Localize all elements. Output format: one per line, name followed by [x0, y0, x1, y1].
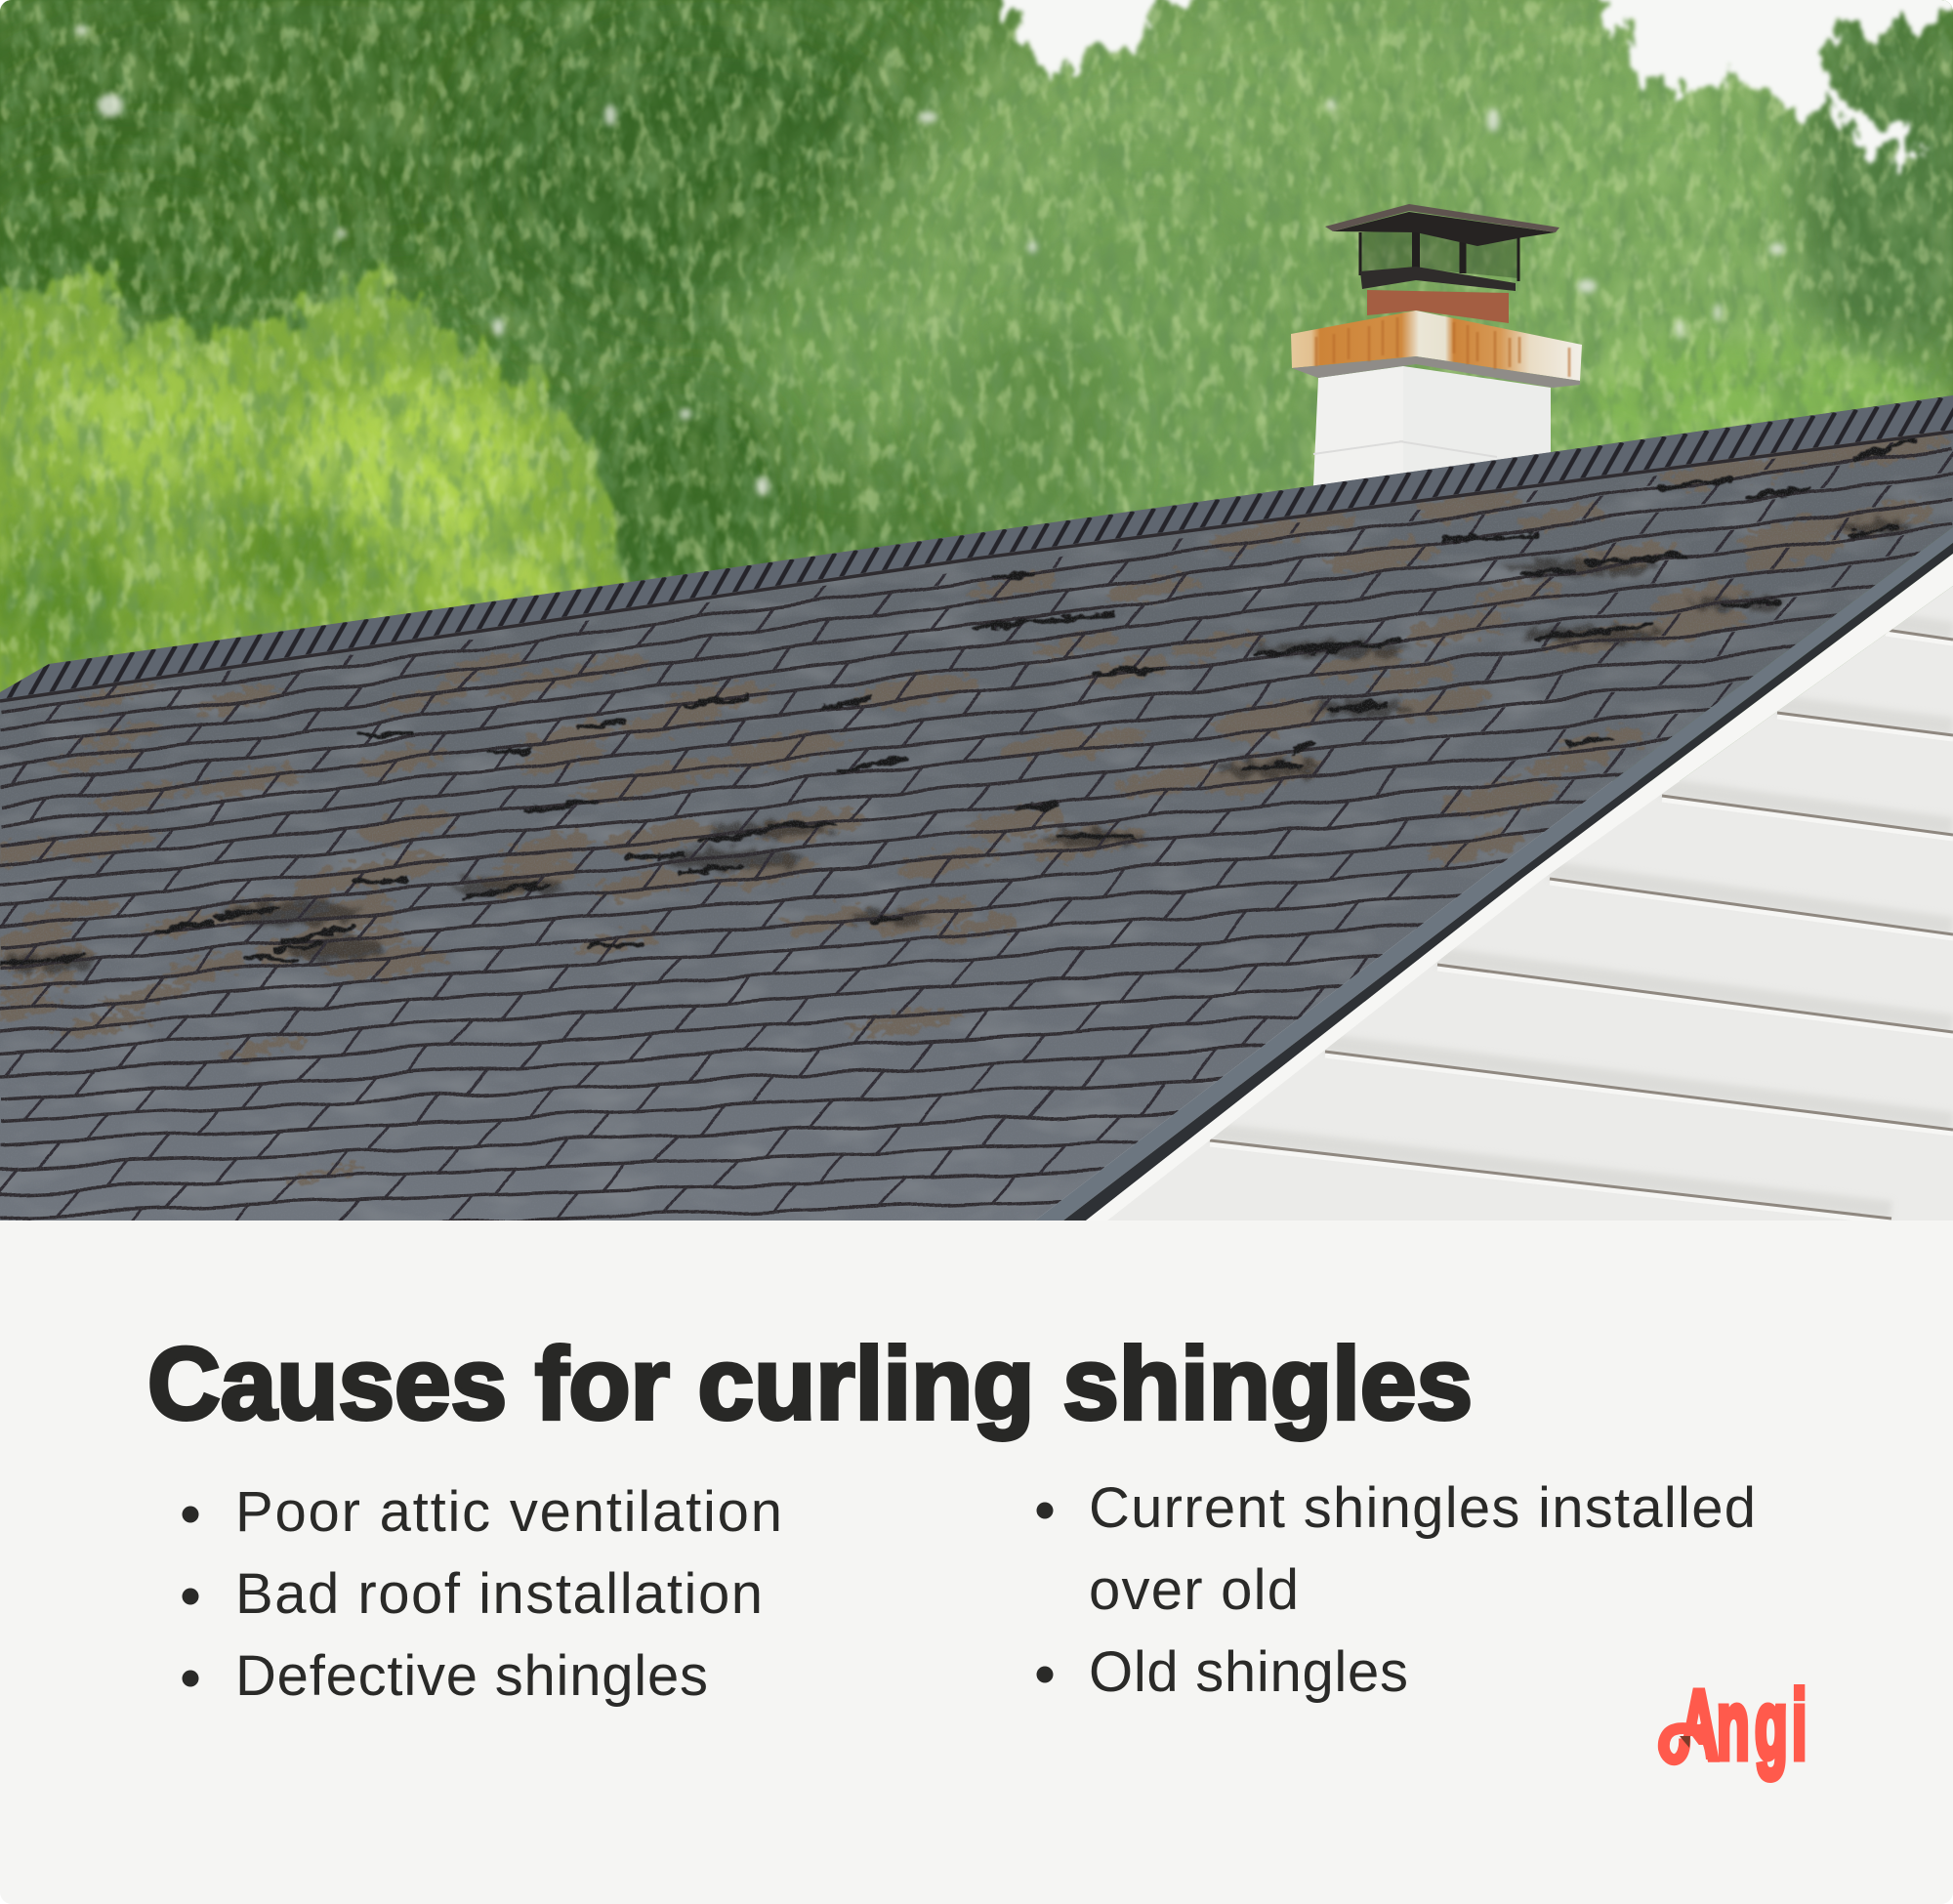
- peeling shingle patches: [0, 428, 1950, 1183]
- sky: [1005, 0, 1953, 161]
- rusted chimney cap: [1291, 310, 1582, 381]
- bullet: current shingles installed over old: over old: [1089, 1558, 1299, 1622]
- foliage texture: [0, 0, 1950, 646]
- logo: Angi: Angi: [1680, 1672, 1807, 1780]
- bullet: defective shingles: Defective shingles: [235, 1644, 708, 1708]
- bullet: current shingles installed over old: Current shingles installed: [1089, 1476, 1756, 1540]
- siding: [1107, 586, 1953, 1222]
- roof edge flashing: [1035, 527, 1953, 1221]
- curled shingle edges: [0, 439, 1914, 964]
- bullet: old shingles: Old shingles: [1089, 1640, 1408, 1704]
- photo: roof with curling shingles: [0, 0, 1953, 1239]
- chimney flue: [1367, 290, 1509, 323]
- dark smudges under lifted shingles: [0, 519, 1914, 971]
- chimney: [1291, 204, 1582, 508]
- trees background: [0, 0, 1953, 781]
- right cause list: [1037, 1476, 1756, 1704]
- chimney cage: [1360, 230, 1518, 278]
- bright bush at lower left: [0, 258, 631, 692]
- siding board lines: [1210, 630, 1953, 1219]
- chimney body: [1311, 366, 1403, 508]
- shingle courses: [0, 439, 1953, 1239]
- siding shadows: [1210, 621, 1953, 1210]
- title: Causes for curling shingles: [147, 1327, 1473, 1441]
- roof: [0, 391, 1953, 1239]
- sky gaps in foliage: [75, 25, 1785, 496]
- left cause list: [182, 1480, 782, 1708]
- bullet: current shingles installed over old: [1037, 1476, 1756, 1622]
- bullet: bad roof installation: Bad roof installation: [235, 1562, 763, 1626]
- panel: causes text: [147, 1327, 1807, 1780]
- ridge cap: [0, 395, 1953, 701]
- shingle joints: [0, 439, 1953, 1227]
- siding highlights: [1210, 634, 1953, 1222]
- chimney hood: [1333, 212, 1556, 246]
- bullet: poor attic ventilation: Poor attic ventilation: [235, 1480, 782, 1544]
